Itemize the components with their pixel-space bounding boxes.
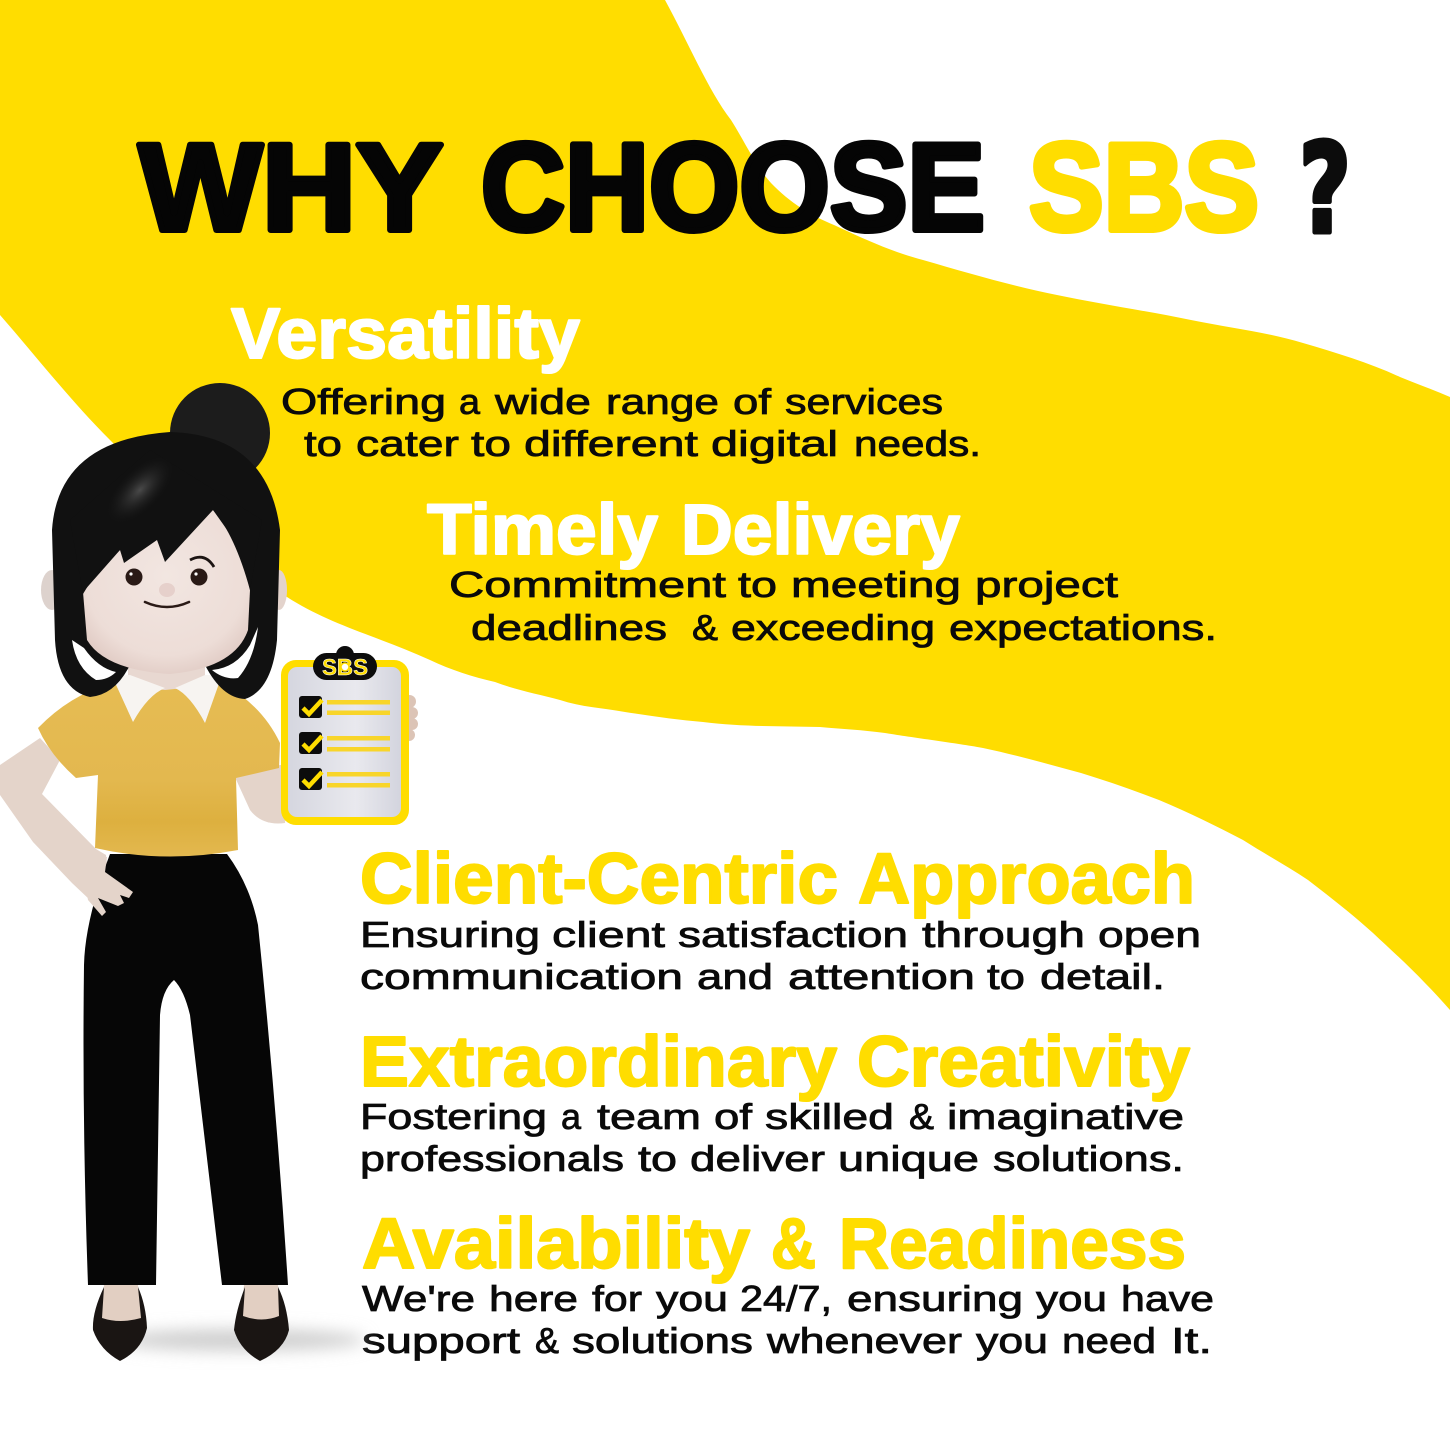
heading: timely delivery (427, 491, 961, 570)
checklist row 1 (299, 696, 390, 718)
text: availability description: you (656, 1278, 728, 1319)
text: client-centric description: Ensuring (360, 914, 540, 955)
block: timely delivery (427, 491, 1217, 648)
text: availability description: here (489, 1278, 578, 1319)
hair bun (170, 383, 270, 483)
text: versatility description: wide (494, 381, 591, 422)
text: versatility description: of (733, 381, 772, 422)
text: availability description: solutions (572, 1320, 753, 1361)
hair back (52, 432, 280, 699)
text: versatility description: a (459, 381, 481, 422)
text: timely delivery description: deadlines (471, 607, 667, 648)
floor shadow (115, 1329, 365, 1351)
text: creativity description: team (597, 1096, 701, 1137)
text: client-centric description: attention (788, 956, 975, 997)
text: creativity description: of (714, 1096, 753, 1137)
fringe (70, 450, 262, 594)
heading: extraordinary creativity: Creativity (857, 1023, 1191, 1102)
hand on hip fingers (80, 857, 133, 916)
text: availability description: 24/7, (740, 1278, 832, 1319)
right foot and shoe (234, 1285, 289, 1361)
heading: client-centric approach (360, 840, 1195, 919)
heading: availability and readiness (362, 1205, 1186, 1284)
block: extraordinary creativity (360, 1023, 1191, 1179)
hand behind clipboard (396, 695, 418, 741)
title (139, 118, 1351, 262)
text: client-centric description: and (697, 956, 773, 997)
shirt (38, 684, 280, 857)
text: client-centric description: through (922, 914, 1085, 955)
text: creativity description: professionals (360, 1138, 624, 1179)
text: creativity description: unique (838, 1138, 979, 1179)
text: versatility description: needs. (854, 423, 981, 464)
text: timely delivery description (449, 564, 1217, 648)
heading: timely delivery: Timely (427, 491, 659, 570)
face (83, 510, 250, 674)
heading: availability and readiness: & (771, 1205, 816, 1284)
nose (159, 583, 175, 597)
text: timely delivery description: to (738, 564, 777, 605)
text: creativity description: to (638, 1138, 677, 1179)
text: availability description: support (362, 1320, 520, 1361)
text: timely delivery description: & (692, 607, 718, 648)
text: client-centric description: client (552, 914, 665, 955)
text: creativity description: Fostering (360, 1096, 547, 1137)
block: versatility (231, 295, 981, 464)
heading: client-centric approach: Approach (858, 840, 1195, 919)
text: creativity description: solutions. (993, 1138, 1184, 1179)
checklist row 3 (299, 768, 390, 790)
text: client-centric description: open (1098, 914, 1201, 955)
heading: availability and readiness: Readiness (839, 1205, 1186, 1284)
text: client-centric description: detail. (1040, 956, 1165, 997)
text: client-centric description: communication (360, 956, 683, 997)
block: client-centric approach (360, 840, 1201, 997)
text: versatility description: services (785, 381, 943, 422)
left arm on hip (0, 738, 108, 900)
heading: extraordinary creativity: Extraordinary (360, 1023, 838, 1102)
block: availability and readiness (362, 1205, 1214, 1361)
text: client-centric description: satisfaction (678, 914, 908, 955)
text: client-centric description: to (987, 956, 1025, 997)
heading: extraordinary creativity (360, 1023, 1191, 1102)
trousers (84, 854, 288, 1285)
right arm (234, 765, 290, 823)
text: availability description: for (592, 1278, 642, 1319)
text: client-centric description (360, 914, 1201, 997)
text: creativity description: & (909, 1096, 934, 1137)
character: woman holding clipboard (0, 383, 418, 1361)
text: timely delivery description: exceeding (731, 607, 935, 648)
text: versatility description (281, 381, 981, 464)
heading: availability and readiness: Availability (362, 1205, 751, 1284)
text: creativity description: imaginative (947, 1096, 1184, 1137)
text: availability description: have (1121, 1278, 1214, 1319)
left ear (41, 570, 63, 610)
text: versatility description: digital (711, 423, 838, 464)
hair gap crescents (72, 627, 258, 680)
hair sheen (96, 446, 184, 534)
text: availability description: need (1062, 1320, 1156, 1361)
text: availability description (362, 1278, 1214, 1361)
heading: versatility: Versatility (231, 295, 581, 374)
eyes (126, 568, 208, 586)
text: availability description: ensuring (847, 1278, 1023, 1319)
text: timely delivery description: meeting (791, 564, 961, 605)
text: versatility description: cater (356, 423, 459, 464)
clipboard clip with logo: SBS (322, 654, 368, 680)
text: creativity description: skilled (765, 1096, 894, 1137)
clipboard frame (281, 660, 409, 825)
text: versatility description: to (471, 423, 511, 464)
title word: why: WHY (139, 119, 443, 257)
checklist row 2 (299, 732, 390, 754)
shirt collar (112, 675, 222, 723)
title word: choose: CHOOSE (481, 119, 985, 257)
text: versatility description: Offering (281, 381, 446, 422)
text: creativity description (360, 1096, 1184, 1179)
text: timely delivery description: expectations. (949, 607, 1217, 648)
text: availability description: We're (362, 1278, 475, 1319)
title brand name: SBS (1029, 119, 1259, 257)
right ear (271, 570, 287, 610)
text: availability description: you (976, 1320, 1048, 1361)
yellow wave background (0, 0, 1450, 1010)
clipboard (281, 646, 409, 825)
title question mark: ? (1299, 118, 1351, 262)
clipboard clip with logo (313, 646, 377, 680)
text: availability description: It. (1171, 1320, 1212, 1361)
text: availability description: whenever (766, 1320, 962, 1361)
text: timely delivery description: project (975, 564, 1118, 605)
left foot and shoe (93, 1285, 147, 1361)
neck (128, 650, 205, 695)
text: versatility description: range (606, 381, 719, 422)
text: timely delivery description: Commitment (449, 564, 726, 605)
text: availability description: you (1036, 1278, 1107, 1319)
eyebrow (190, 557, 214, 567)
text: availability description: & (535, 1320, 559, 1361)
text: versatility description: to (304, 423, 342, 464)
text: creativity description: a (561, 1096, 582, 1137)
text: creativity description: deliver (690, 1138, 825, 1179)
heading: timely delivery: Delivery (681, 491, 961, 570)
clipboard paper (288, 667, 401, 817)
text: versatility description: different (524, 423, 698, 464)
smile (145, 602, 189, 607)
heading: client-centric approach: Client-Centric (360, 840, 838, 919)
